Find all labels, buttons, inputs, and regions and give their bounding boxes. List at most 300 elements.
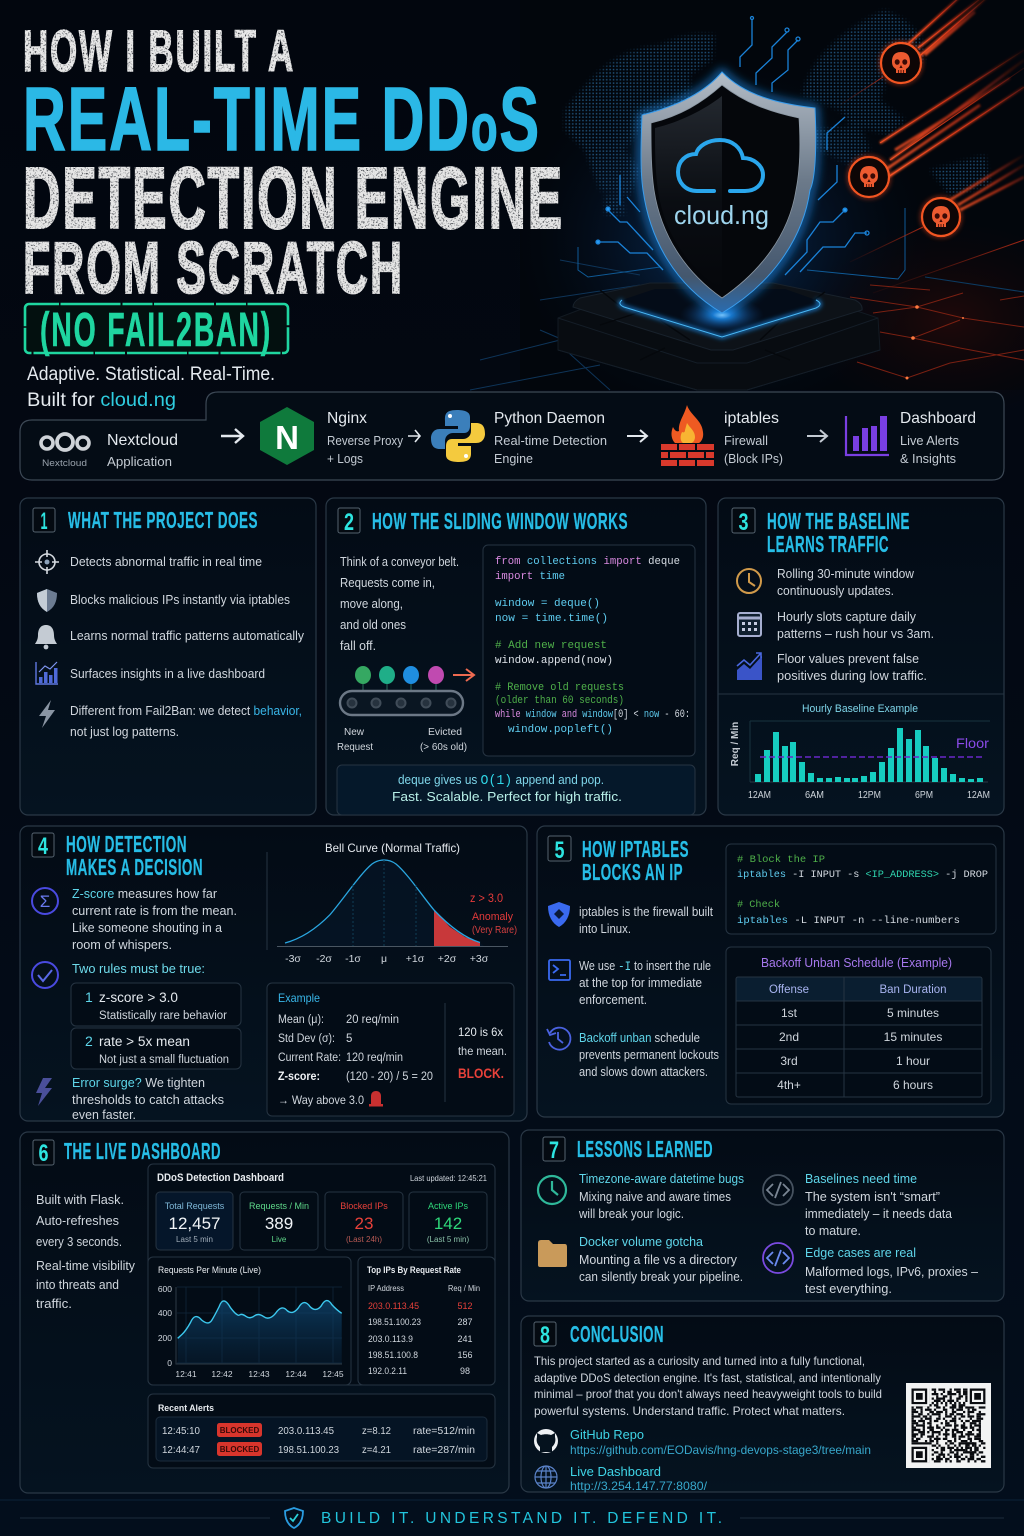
nginx label: + Logs — [327, 451, 363, 466]
example card: Std Dev (σ): — [278, 1033, 335, 1045]
icon: nginx — [260, 407, 314, 465]
panel 5: iptables — [537, 826, 1004, 1117]
icon: clock — [737, 569, 761, 593]
arrow — [408, 430, 420, 442]
chart: bell curve: Bell Curve (Normal Traffic) — [325, 841, 460, 855]
table: backoff unban schedule — [726, 947, 991, 1104]
title — [23, 19, 564, 309]
icon: blue shield — [548, 902, 570, 927]
table: top ips: 192.0.2.11 — [368, 1366, 407, 1376]
icon: clock — [538, 1176, 566, 1204]
tagline: Built for cloud.ng — [27, 390, 176, 411]
number badge 4 — [32, 833, 54, 860]
alert row 1 — [162, 1423, 475, 1437]
code: sliding window deque: now = time.time() — [495, 613, 608, 625]
line chart: requests per minute: 12:41 — [175, 1369, 197, 1379]
stat: blocked ips: Blocked IPs — [340, 1201, 388, 1211]
number badge 1 — [33, 508, 55, 535]
hero illustration: shield on pedestal under attack — [470, 0, 1024, 420]
conveyor belt diagram: New — [344, 726, 364, 738]
bar chart: hourly baseline: Req / Min — [730, 722, 741, 766]
conveyor belt diagram: Evicted — [428, 726, 462, 738]
item: rolling window: Rolling 30-minute window — [777, 567, 915, 581]
firewall text: into Linux. — [579, 922, 631, 936]
rule 2: 2 — [85, 1033, 93, 1049]
item: learns: Learns normal traffic patterns automatically — [70, 629, 305, 643]
lesson: edge cases: Malformed logs, IPv6, proxies – — [805, 1265, 978, 1279]
example card: Current Rate: — [278, 1052, 341, 1064]
link: live dashboard — [570, 1465, 708, 1493]
rule 1: z-score > 3.0 — [99, 990, 178, 1005]
icon: sigma: Σ — [40, 892, 50, 911]
example card: BLOCK. — [458, 1065, 504, 1081]
table: backoff unban schedule: 2nd — [779, 1030, 799, 1044]
chart: bell curve: Anomaly — [472, 911, 513, 923]
qr code — [906, 1383, 991, 1468]
bar chart: hourly baseline: 6AM — [805, 790, 824, 801]
stat: blocked ips: (Last 24h) — [346, 1235, 382, 1244]
bar chart: hourly baseline: Hourly Baseline Example — [802, 703, 918, 715]
table: backoff unban schedule: 5 minutes — [887, 1006, 939, 1020]
stat: requests per minute: 389 — [265, 1214, 293, 1233]
chart: bell curve: -2σ — [316, 953, 332, 965]
recent alerts — [148, 1394, 495, 1468]
item: blocks: Blocks malicious IPs instantly via iptables — [70, 593, 290, 607]
alert row 1: z=8.12 — [362, 1426, 391, 1437]
icon: dashboard chart — [846, 416, 889, 455]
conveyor description: Think of a conveyor belt. — [340, 555, 459, 569]
table: top ips: 287 — [457, 1317, 473, 1327]
badge: no fail2ban: (NO FAIL2BAN) — [40, 304, 272, 357]
number badge 5: 5 — [554, 837, 564, 864]
rule 1 — [71, 983, 241, 1026]
number badge 6 — [33, 1140, 54, 1167]
nginx label: Reverse Proxy — [327, 433, 403, 448]
rule 2 — [71, 1028, 241, 1069]
conclusion paragraph: minimal – proof that you don't always need heavyweight tools to build — [534, 1387, 882, 1401]
backoff text: Backoff unban schedule — [579, 1031, 700, 1045]
table: top ips: Top IPs By Request Rate — [367, 1265, 461, 1276]
conveyor belt diagram: Request — [337, 741, 373, 753]
link: github repo — [570, 1428, 871, 1457]
conveyor belt diagram: (> 60s old) — [420, 741, 467, 753]
bar chart: hourly baseline — [730, 703, 990, 801]
table: top ips: IP Address — [368, 1284, 404, 1293]
heading: LEARNS TRAFFIC — [767, 531, 889, 557]
lesson: baselines: to mature. — [805, 1224, 861, 1238]
table: top ips — [358, 1257, 495, 1385]
chart: bell curve: μ — [381, 953, 387, 965]
description: traffic. — [36, 1297, 72, 1311]
line chart: requests per minute: 0 — [167, 1358, 172, 1368]
stat: active ips — [409, 1192, 487, 1250]
icon: python logo — [431, 410, 485, 462]
python label: Python Daemon — [494, 410, 605, 427]
heading — [582, 836, 689, 885]
heading: HOW DETECTION — [66, 831, 187, 857]
callout: deque complexity — [337, 765, 695, 815]
code: iptables commands — [726, 844, 996, 934]
dashboard label — [900, 410, 976, 466]
bar chart: hourly baseline: 6PM — [915, 790, 933, 801]
pedestal — [558, 283, 880, 390]
stat: active ips: (Last 5 min) — [427, 1235, 469, 1244]
conveyor description — [340, 555, 459, 653]
title: FROM SCRATCH — [23, 228, 404, 309]
icon: nextcloud logo: Nextcloud — [42, 458, 87, 469]
item: rolling window: continuously updates. — [777, 584, 894, 598]
heading — [66, 831, 203, 880]
icon: code purple — [763, 1243, 793, 1273]
table: backoff unban schedule: 1st — [781, 1006, 798, 1020]
lesson: baselines: Baselines need time — [805, 1172, 917, 1186]
icon: crosshair — [35, 550, 59, 574]
conclusion paragraph: This project started as a curiosity and turned into a fully functional, — [534, 1354, 865, 1368]
icon: attack skull 3 — [920, 196, 962, 238]
conclusion paragraph — [534, 1354, 882, 1418]
table: top ips: 198.51.100.23 — [368, 1317, 421, 1327]
stat: requests per minute — [240, 1192, 318, 1250]
panel 3: baseline — [718, 498, 1004, 815]
lesson: docker: Docker volume gotcha — [579, 1235, 703, 1249]
conveyor description: Requests come in, — [340, 576, 435, 590]
icon: calendar — [738, 613, 761, 636]
code: sliding window deque: (older than 60 seconds) — [495, 695, 624, 707]
nextcloud label — [107, 432, 178, 469]
description: Built with Flask. — [36, 1193, 124, 1207]
item: rolling window — [777, 567, 915, 598]
icon: bell — [35, 625, 57, 649]
z-score text: Z-score measures how far — [72, 887, 217, 901]
line chart: requests per minute: 200 — [158, 1333, 172, 1343]
description — [36, 1193, 136, 1311]
alert row 2: z=4.21 — [362, 1445, 391, 1456]
lesson: docker: can silently break your pipeline. — [579, 1270, 743, 1284]
tagline: Adaptive. Statistical. Real-Time. — [27, 364, 275, 385]
meteor trails — [840, 0, 1024, 293]
icon: footer shield — [285, 1508, 303, 1528]
icon: code gray — [763, 1175, 793, 1205]
item: hourly slots: patterns – rush hour vs 3am. — [777, 627, 934, 641]
number badge 3: 3 — [738, 509, 748, 536]
icon: siren — [369, 1091, 383, 1106]
line chart: requests per minute: 400 — [158, 1308, 172, 1318]
alert row 2: 12:44:47 — [162, 1445, 200, 1456]
lesson: edge cases: Edge cases are real — [805, 1246, 916, 1260]
item: floor values: Floor values prevent false — [777, 652, 919, 666]
firewall text — [579, 905, 713, 936]
code: iptables commands: # Check — [737, 899, 780, 911]
z-score text: current rate is from the mean. — [72, 904, 237, 918]
icon: nginx: N — [275, 419, 299, 456]
example card: 5 — [346, 1033, 352, 1045]
example card: (120 - 20) / 5 = 20 — [346, 1071, 433, 1083]
code: sliding window deque: # Add new request — [495, 640, 607, 652]
rules heading: Two rules must be true: — [72, 962, 205, 976]
number badge 7: 7 — [549, 1137, 559, 1164]
line chart: requests per minute: Requests Per Minute (Live) — [158, 1265, 261, 1276]
stat: total requests: 12,457 — [168, 1214, 220, 1233]
chart: bell curve — [277, 841, 517, 965]
z-score text: Like someone shouting in a — [72, 921, 222, 935]
bar chart: hourly baseline: 12PM — [858, 790, 881, 801]
alert row 1: rate=512/min — [413, 1426, 475, 1437]
arrow — [807, 430, 827, 442]
icon: lightning — [36, 1078, 52, 1106]
icon: terminal — [549, 960, 570, 980]
recent alerts: Recent Alerts — [158, 1403, 214, 1414]
icon: nextcloud logo — [41, 434, 89, 469]
rule 2: rate > 5x mean — [99, 1034, 190, 1049]
number badge 5 — [548, 836, 571, 864]
nextcloud label: Application — [107, 454, 172, 469]
python label — [494, 410, 607, 466]
iptables label: Firewall — [724, 433, 768, 448]
number badge 2 — [338, 508, 360, 536]
table: top ips: 203.0.113.45 — [368, 1301, 419, 1311]
dashboard label: Live Alerts — [900, 433, 959, 448]
alert row 2: BLOCKED — [220, 1445, 259, 1454]
item: different — [70, 704, 302, 739]
example card: 20 req/min — [346, 1014, 399, 1026]
python label: Engine — [494, 451, 533, 466]
code: sliding window deque: # Remove old requests — [495, 682, 624, 694]
heading: HOW THE SLIDING WINDOW WORKS — [372, 508, 628, 534]
chart: bell curve: +1σ — [406, 953, 425, 965]
stat: active ips: 142 — [434, 1214, 462, 1233]
icon: insight chart — [36, 662, 58, 684]
number badge 1: 1 — [40, 508, 48, 535]
table: top ips: 512 — [457, 1301, 473, 1311]
nginx label: Nginx — [327, 410, 367, 427]
iptables label: (Block IPs) — [724, 451, 783, 466]
lesson: edge cases — [805, 1246, 978, 1296]
example card: the mean. — [458, 1044, 507, 1058]
example card: Example — [278, 991, 320, 1005]
lesson: docker: Mounting a file vs a directory — [579, 1253, 738, 1267]
number badge 8: 8 — [540, 1322, 550, 1349]
badge: no fail2ban — [25, 304, 288, 357]
chart: bell curve: +3σ — [470, 953, 489, 965]
rule 1: Statistically rare behavior — [99, 1010, 227, 1022]
link: live dashboard: Live Dashboard — [570, 1465, 661, 1479]
table: backoff unban schedule: Offense — [769, 984, 809, 996]
panel: architecture flow — [20, 392, 1004, 480]
item: floor values — [777, 652, 927, 683]
alert row 1: 12:45:10 — [162, 1426, 200, 1437]
lesson: timezone: Timezone-aware datetime bugs — [579, 1172, 744, 1186]
heading — [767, 508, 910, 557]
dashboard header: Last updated: 12:45:21 — [410, 1173, 487, 1183]
lesson: edge cases: test everything. — [805, 1282, 892, 1296]
icon: lightning — [39, 700, 55, 728]
icon: floor chart — [737, 653, 762, 680]
stat: requests per minute: Requests / Min — [249, 1201, 309, 1211]
description: into threats and — [36, 1278, 119, 1292]
number badge 4: 4 — [38, 833, 48, 860]
callout: deque complexity: deque gives us O(1) append and pop. — [398, 773, 604, 789]
backoff text: and slows down attackers. — [579, 1065, 708, 1079]
icon: check — [32, 962, 58, 988]
conclusion paragraph: powerful systems. Understand traffic. Protect what matters. — [534, 1404, 845, 1418]
error surge text — [72, 1076, 224, 1122]
tagline — [27, 364, 275, 411]
title: REAL-TIME DDoS — [23, 70, 541, 170]
line chart: requests per minute: 12:42 — [211, 1369, 233, 1379]
footer tagline — [0, 1500, 1024, 1528]
chart: bell curve: +2σ — [438, 953, 457, 965]
number badge 3 — [732, 508, 755, 536]
item: different: not just log patterns. — [70, 725, 179, 739]
rule 1: 1 — [85, 989, 93, 1005]
firewall text: iptables is the firewall built — [579, 905, 713, 919]
example card: → Way above 3.0 — [278, 1093, 364, 1107]
z-score text — [72, 887, 237, 952]
stat: total requests — [156, 1192, 233, 1250]
icon: cloud — [678, 140, 763, 191]
heading: LESSONS LEARNED — [577, 1136, 713, 1162]
icon: history — [547, 1028, 570, 1050]
alert row 1: 203.0.113.45 — [278, 1426, 334, 1437]
floor grid — [470, 208, 1024, 390]
panel 4: detection decision — [20, 826, 527, 1122]
stat: requests per minute: Live — [272, 1235, 287, 1244]
code: iptables commands: # Block the IP — [737, 854, 825, 866]
chart: bell curve: z > 3.0 — [470, 893, 503, 905]
stat: active ips: Active IPs — [428, 1201, 469, 1211]
code: sliding window deque — [483, 545, 695, 756]
icon: github — [534, 1429, 558, 1453]
number badge 8 — [534, 1322, 556, 1349]
example card: 120 is 6x — [458, 1025, 503, 1039]
backoff text — [579, 1031, 719, 1079]
insert rule text — [579, 959, 711, 1007]
callout: deque complexity: Fast. Scalable. Perfect for high traffic. — [392, 789, 622, 804]
title: DETECTION ENGINE — [23, 150, 564, 247]
table: backoff unban schedule: Ban Duration — [879, 984, 947, 996]
chart: bell curve: (Very Rare) — [472, 925, 517, 936]
error surge text: Error surge? We tighten — [72, 1076, 205, 1090]
heading: HOW IPTABLES — [582, 836, 689, 862]
lesson: baselines: immediately – it needs data — [805, 1207, 952, 1221]
heading: THE LIVE DASHBOARD — [64, 1138, 221, 1164]
bar chart: hourly baseline: 12AM — [748, 790, 771, 801]
alert row 2: rate=287/min — [413, 1445, 475, 1456]
code: iptables commands: iptables -I INPUT -s <IP_ADDRESS> -j DROP — [737, 869, 988, 881]
line chart: requests per minute: 12:45 — [322, 1369, 344, 1379]
error surge text: thresholds to catch attacks — [72, 1093, 224, 1107]
stat: blocked ips: 23 — [355, 1214, 373, 1233]
link: live dashboard: http://3.254.147.77:8080/ — [570, 1479, 708, 1493]
bar chart: hourly baseline: 12AM — [967, 790, 990, 801]
rule 2: Not just a small fluctuation — [99, 1054, 229, 1066]
title: HOW I BUILT A — [23, 19, 295, 84]
heading: BLOCKS AN IP — [582, 859, 683, 885]
table: top ips: 203.0.113.9 — [368, 1334, 413, 1344]
table: top ips: 198.51.100.8 — [368, 1350, 418, 1360]
link: github repo: GitHub Repo — [570, 1428, 644, 1442]
number badge 2: 2 — [344, 509, 354, 536]
icon: folder — [538, 1240, 567, 1267]
chart: bell curve: -3σ — [285, 953, 301, 965]
table: top ips: 156 — [457, 1350, 473, 1360]
description: every 3 seconds. — [36, 1235, 122, 1249]
number badge 6: 6 — [38, 1140, 48, 1167]
lesson: baselines — [805, 1172, 952, 1238]
bar chart: hourly baseline: Floor — [956, 736, 990, 751]
dashboard header: DDoS Detection Dashboard — [157, 1172, 284, 1184]
description: Real-time visibility — [36, 1259, 136, 1273]
chart: bell curve: -1σ — [345, 953, 361, 965]
item: detects: Detects abnormal traffic in real time — [70, 555, 262, 569]
panel 1: what the project does — [20, 498, 316, 815]
alert row 1: BLOCKED — [220, 1426, 259, 1435]
backoff text: prevents permanent lockouts — [579, 1048, 719, 1062]
line chart: requests per minute: 12:44 — [285, 1369, 307, 1379]
nextcloud label: Nextcloud — [107, 432, 178, 449]
python label: Real-time Detection — [494, 433, 607, 448]
table: top ips: 241 — [457, 1334, 473, 1344]
conclusion paragraph: adaptive DDoS detection engine. It's fast, statistical, and intentionally — [534, 1371, 881, 1385]
table: backoff unban schedule: 15 minutes — [884, 1030, 942, 1044]
code: sliding window deque: import time — [495, 571, 565, 583]
panel 7: lessons learned — [521, 1130, 1004, 1301]
dashboard label: Dashboard — [900, 410, 976, 427]
iptables label — [724, 410, 783, 466]
item: hourly slots: Hourly slots capture daily — [777, 610, 917, 624]
heading: CONCLUSION — [570, 1321, 664, 1347]
table: backoff unban schedule: 3rd — [780, 1054, 798, 1068]
conveyor belt diagram — [337, 666, 474, 753]
conveyor description: fall off. — [340, 639, 376, 653]
table: backoff unban schedule: 1 hour — [896, 1054, 930, 1068]
heading: HOW THE BASELINE — [767, 508, 910, 534]
code: sliding window deque: window = deque() — [495, 598, 600, 610]
lesson: timezone: Mixing naive and aware times — [579, 1190, 731, 1204]
example card: 120 req/min — [346, 1052, 403, 1064]
table: backoff unban schedule: 6 hours — [893, 1078, 933, 1092]
dashboard label: & Insights — [900, 451, 956, 466]
code: iptables commands: iptables -L INPUT -n --line-numbers — [737, 915, 960, 927]
line chart: requests per minute — [148, 1257, 351, 1385]
code: sliding window deque: window.append(now) — [495, 655, 613, 667]
table: top ips: 98 — [460, 1366, 470, 1376]
insert rule text: We use -I to insert the rule — [579, 959, 711, 974]
table: top ips: Req / Min — [448, 1284, 480, 1293]
code: sliding window deque: from collections import deque — [495, 556, 680, 568]
icon: shield — [641, 72, 816, 313]
icon: dotted world map — [562, 8, 992, 216]
line chart: requests per minute: 12:43 — [248, 1369, 270, 1379]
example card: Z-score: — [278, 1071, 320, 1083]
item: surfaces: Surfaces insights in a live dashboard — [70, 667, 265, 681]
line chart: requests per minute: 600 — [158, 1284, 172, 1294]
panel 8: conclusion — [521, 1316, 1004, 1493]
insert rule text: at the top for immediate — [579, 976, 702, 990]
icon: attack skull 1 — [879, 41, 923, 85]
dashboard header — [148, 1164, 495, 1385]
z-score text: room of whispers. — [72, 938, 172, 952]
insert rule text: enforcement. — [579, 993, 647, 1007]
link: github repo: https://github.com/EODavis/hng-devops-stage3/tree/main — [570, 1443, 871, 1457]
code: sliding window deque: window.popleft() — [508, 724, 613, 736]
stat: blocked ips — [325, 1192, 403, 1250]
panel 6: live dashboard — [20, 1132, 509, 1493]
stat: total requests: Total Requests — [165, 1201, 225, 1211]
conveyor description: and old ones — [340, 618, 406, 632]
nginx label — [327, 410, 403, 466]
lesson: docker — [579, 1235, 743, 1284]
